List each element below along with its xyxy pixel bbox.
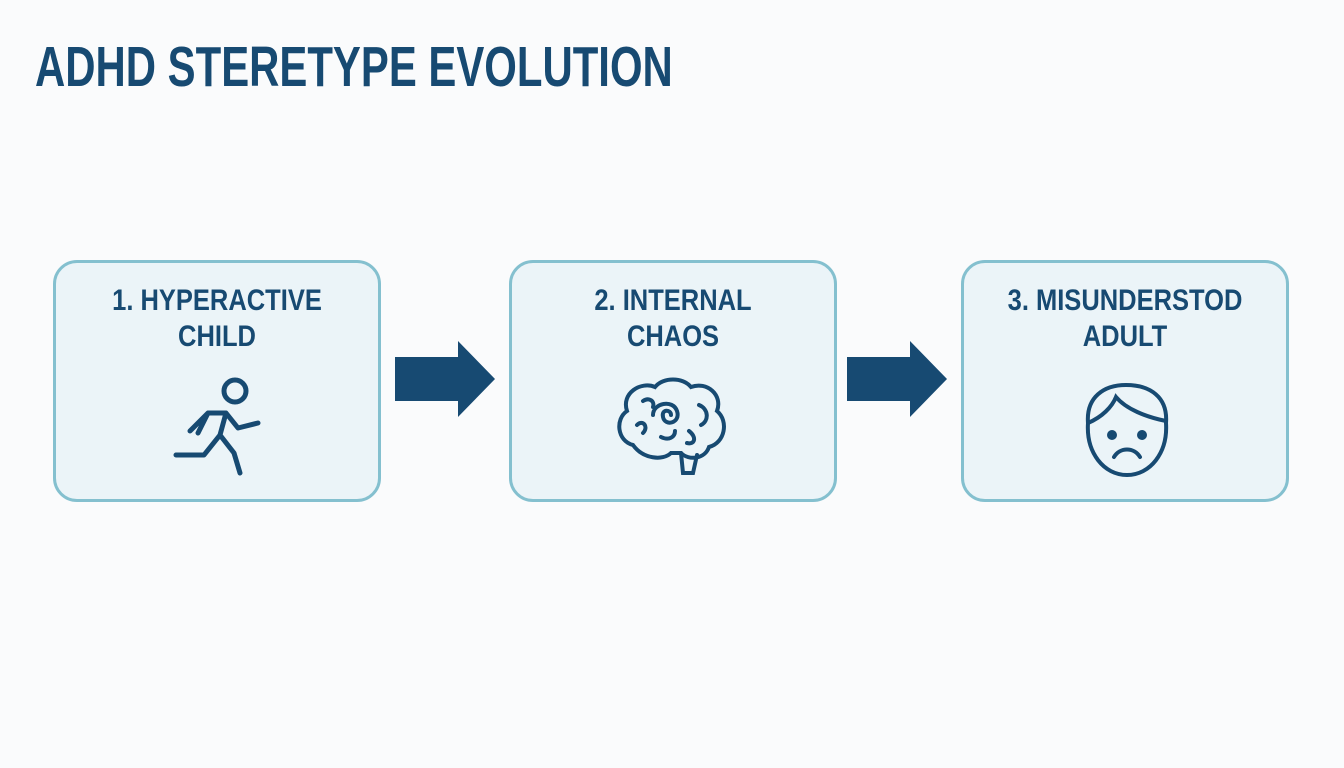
panel: misunderstood adult (961, 260, 1289, 502)
label: 3. MISUNDERSTOD (1008, 284, 1242, 317)
panel: hyperactive child (53, 260, 381, 502)
label (1008, 284, 1242, 353)
label: ADULT (1083, 320, 1167, 353)
arrow 2 (847, 341, 947, 417)
label: 2. INTERNAL (594, 284, 752, 317)
label: CHILD (178, 320, 256, 353)
label (594, 284, 752, 353)
panel: internal chaos (509, 260, 837, 502)
icon: brain (617, 378, 726, 475)
icon: runner (174, 378, 260, 476)
title: ADHD STERETYPE EVOLUTION (35, 35, 673, 99)
label: CHAOS (627, 320, 719, 353)
icon: sad face (1086, 383, 1168, 477)
label (112, 284, 322, 353)
arrow 1 (395, 341, 495, 417)
label: 1. HYPERACTIVE (112, 284, 322, 317)
